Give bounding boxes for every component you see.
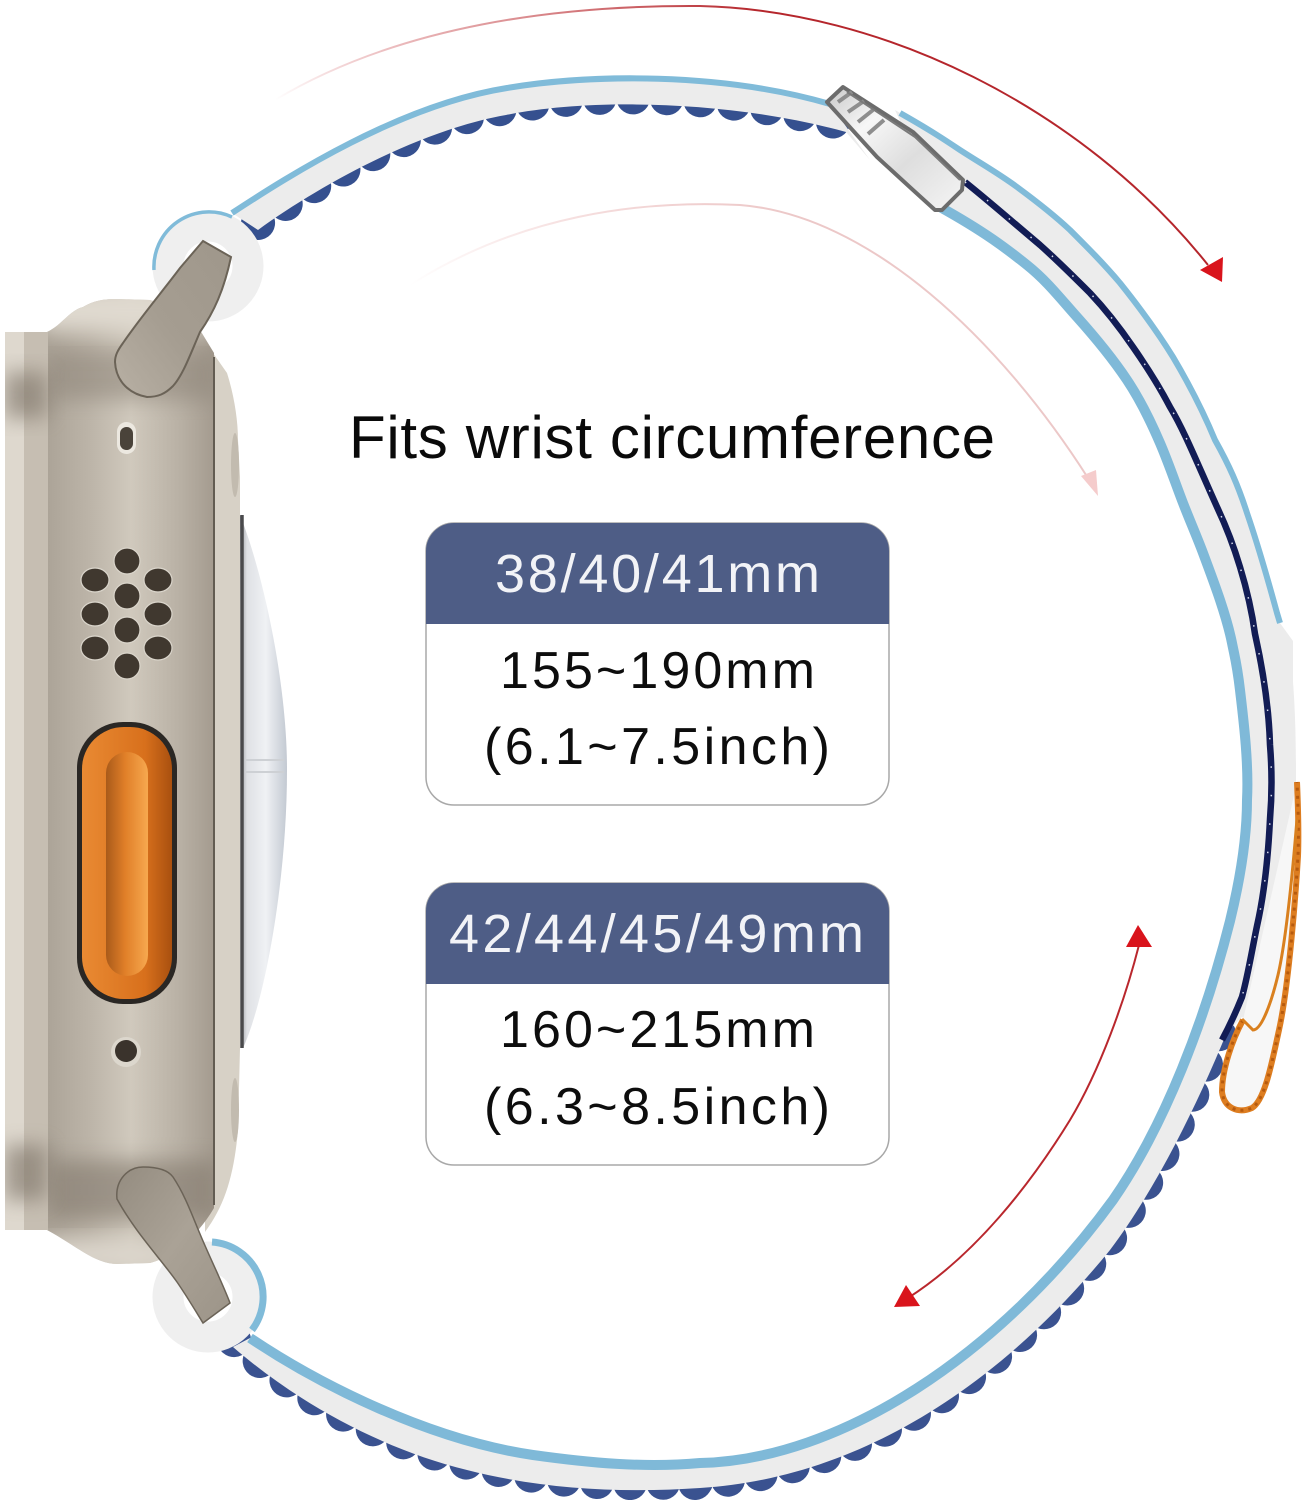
card range inch: (6.3~8.5inch) [484,1078,830,1136]
watch: body [5,290,220,1270]
card heading: 42/44/45/49mm [449,904,864,964]
watch: digital crown glass [240,515,287,1048]
card: 42/44/45/49mm [426,883,889,1165]
card range mm: 155~190mm [500,642,815,700]
watch: lower hole [111,1037,141,1067]
watch: top lug [115,241,231,397]
card heading: 38/40/41mm [495,544,820,604]
watch: body side [205,345,240,1232]
orange pull loop [1222,782,1298,1110]
watch band: top segment [232,78,870,230]
watch band: side and bottom segment [233,110,1297,1490]
arrow: upper red arc [275,6,1223,282]
top band ring [154,212,248,306]
card range mm: 160~215mm [500,1001,815,1059]
arrow: faint pink arc [410,204,1098,496]
clasp [827,87,963,210]
watch: bottom lug [117,1167,230,1323]
watch: speaker holes [81,548,172,679]
arrow: lower double-headed red arc [894,925,1152,1307]
bottom band ring [168,1242,263,1337]
watch: orange action button [77,722,177,1004]
watch: microphone slit [117,422,136,454]
title: Fits wrist circumference [349,404,995,471]
card range inch: (6.1~7.5inch) [484,718,830,776]
card: 38/40/41mm [426,523,889,805]
